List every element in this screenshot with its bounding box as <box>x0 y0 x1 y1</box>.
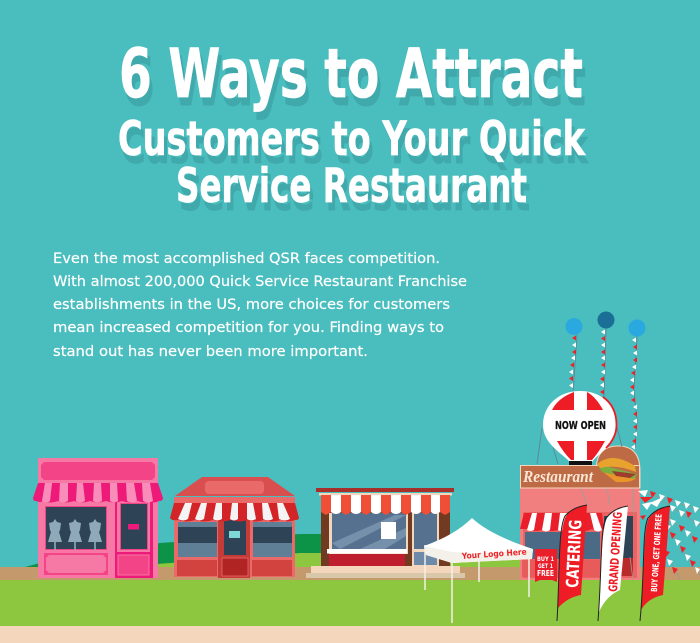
sign: buy 1 get 1 free <box>535 549 557 582</box>
sign: buy 1 get 1 free: BUY 1 <box>537 555 554 563</box>
hills <box>25 534 610 567</box>
ropes <box>581 488 634 580</box>
flag: catering: CATERING <box>563 519 587 588</box>
title shadow <box>121 43 589 222</box>
intro text: Even the most accomplished QSR faces competition. <box>53 251 440 267</box>
now open balloon <box>543 391 617 465</box>
balloons <box>566 312 646 336</box>
red awning <box>170 503 299 522</box>
kiosk awning <box>321 495 450 515</box>
flag: grand opening <box>598 506 628 621</box>
sign: buy 1 get 1 free: FREE <box>537 569 554 578</box>
icon: burger <box>597 458 637 482</box>
flag: buy one get one free <box>640 506 670 621</box>
intro text: stand out has never been more important. <box>53 344 368 360</box>
event tent: Your Logo Here <box>461 547 527 562</box>
intro text: With almost 200,000 Quick Service Restaurant Franchise <box>53 274 467 290</box>
restaurant awning <box>520 513 604 532</box>
balloon strings <box>537 328 637 464</box>
event tent <box>424 518 533 623</box>
store: red cafe <box>170 477 299 578</box>
title: Service Restaurant <box>176 159 527 214</box>
now open balloon: NOW OPEN <box>555 419 606 432</box>
flag: buy one get one free: BUY ONE, GET ONE FREE <box>650 514 665 592</box>
sign: buy 1 get 1 free: GET 1 <box>538 562 553 570</box>
store: restaurant <box>520 488 640 580</box>
intro text: mean increased competition for you. Finding ways to <box>53 320 444 336</box>
intro text <box>53 251 467 360</box>
pink awning <box>33 483 163 502</box>
mannequins <box>48 519 102 550</box>
title shadow: Service Restaurant <box>179 167 530 222</box>
restaurant sign with burger: Restaurant <box>522 467 594 486</box>
flag: grand opening: GRAND OPENING <box>606 511 625 592</box>
store: pink boutique <box>33 458 163 578</box>
title <box>118 35 586 214</box>
store: brick kiosk <box>306 488 465 578</box>
ground <box>0 567 700 643</box>
intro text: establishments in the US, more choices for customers <box>53 297 450 313</box>
flag: catering <box>557 505 587 621</box>
pennants on balloon strings <box>569 330 637 450</box>
pennant strings right <box>638 490 700 580</box>
restaurant sign with burger <box>520 446 640 488</box>
